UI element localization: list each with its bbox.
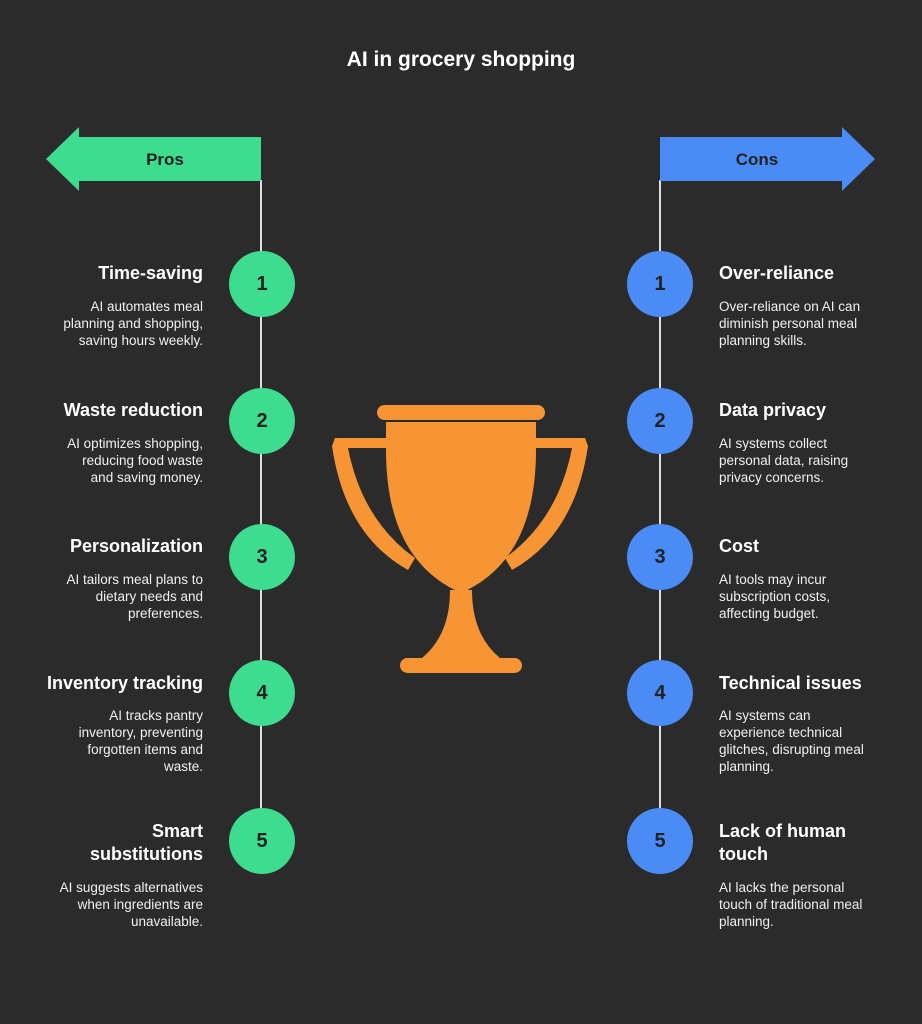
text: 5 (654, 830, 666, 852)
text: 1 (654, 272, 666, 294)
pros 3 (66, 524, 295, 621)
text: 3 (256, 546, 268, 568)
text: Time-saving (98, 263, 203, 283)
text: 4 (256, 682, 268, 704)
text: Over-reliance on AI can diminish personal meal planning skills. (719, 299, 860, 348)
text: AI tailors meal plans to dietary needs and preferences. (66, 572, 203, 621)
cons 2 (627, 388, 848, 485)
text: Inventory tracking (47, 673, 203, 693)
text: touch (719, 844, 768, 864)
text: 3 (654, 546, 666, 568)
arrow: pros (46, 127, 261, 191)
pros 5 (60, 808, 295, 929)
text: Smart (152, 821, 203, 841)
text: AI optimizes shopping, reducing food waste and saving money. (67, 436, 203, 485)
text: AI tracks pantry inventory, preventing forgotten items and waste. (79, 708, 203, 774)
text: 2 (256, 410, 268, 432)
cons 1 (627, 251, 860, 348)
text: AI suggests alternatives when ingredients are unavailable. (60, 880, 203, 929)
arrow: pros: Pros (146, 150, 184, 169)
text: Technical issues (719, 673, 862, 693)
text: Personalization (70, 536, 203, 556)
text: 5 (256, 830, 268, 852)
pros 2 (64, 388, 295, 485)
cons 3 (627, 524, 830, 621)
cons 4 (627, 660, 864, 774)
arrow: cons: Cons (736, 150, 778, 169)
text: Data privacy (719, 400, 826, 420)
icon: trophy (332, 405, 588, 673)
vertical line left (260, 180, 262, 810)
text: AI systems can experience technical glitches, disrupting meal planning. (719, 708, 864, 774)
pros 4 (47, 660, 295, 774)
title: AI in grocery shopping (347, 48, 575, 71)
text: Cost (719, 536, 759, 556)
pros 1 (63, 251, 295, 348)
text: 1 (256, 272, 268, 294)
text: AI lacks the personal touch of traditional meal planning. (719, 880, 862, 929)
text: Waste reduction (64, 400, 203, 420)
cons 5 (627, 808, 862, 929)
vertical line right (659, 180, 661, 810)
text: Over-reliance (719, 263, 834, 283)
text: 4 (654, 682, 666, 704)
text: 2 (654, 410, 666, 432)
text: substitutions (90, 844, 203, 864)
text: Lack of human (719, 821, 846, 841)
text: AI automates meal planning and shopping, saving hours weekly. (63, 299, 203, 348)
text: AI systems collect personal data, raising privacy concerns. (719, 436, 848, 485)
arrow: cons (660, 127, 875, 191)
text: AI tools may incur subscription costs, affecting budget. (719, 572, 830, 621)
